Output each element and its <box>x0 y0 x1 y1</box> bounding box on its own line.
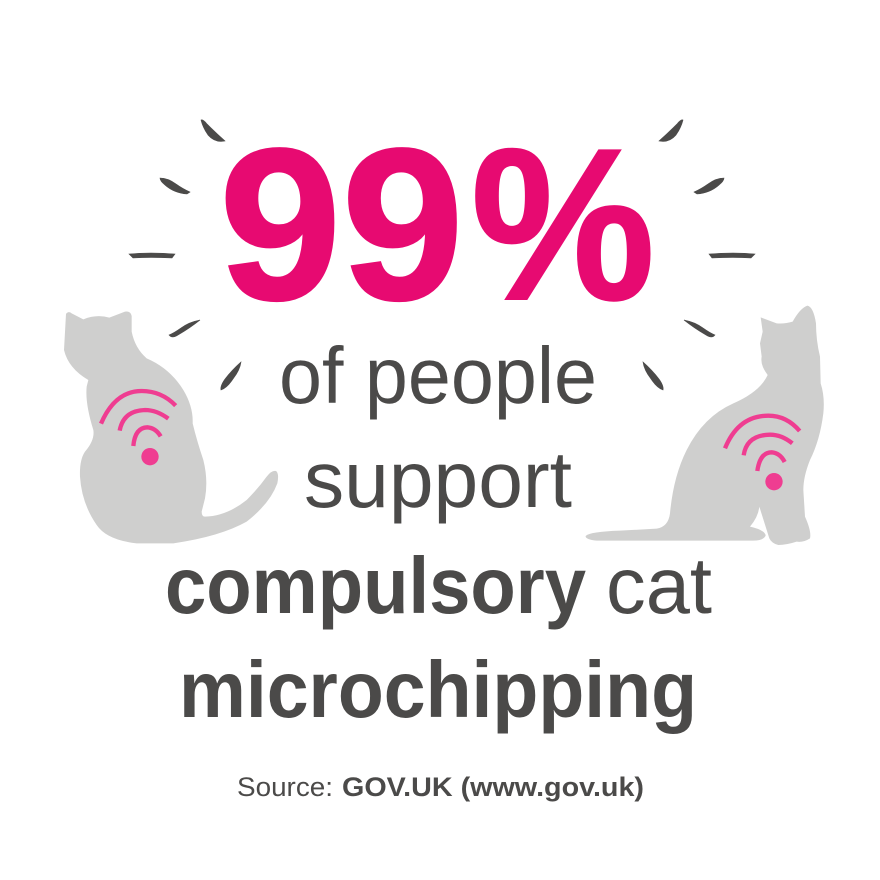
source line: GOV.UK (www.gov.uk) <box>342 772 644 802</box>
source line <box>237 772 644 802</box>
text: of people: of people <box>279 331 597 420</box>
text: compulsory cat: cat <box>606 541 712 630</box>
text: support: support <box>304 435 572 524</box>
text: microchipping: microchipping <box>179 645 697 734</box>
headline: 99%: % <box>471 103 655 345</box>
icon: right cat with microchip signal <box>586 306 824 545</box>
headline: 99% <box>219 103 655 345</box>
text: compulsory cat: compulsory <box>165 541 586 630</box>
source line: Source: <box>237 772 333 802</box>
headline: 99%: 99 <box>219 103 464 345</box>
icon: left cat with microchip signal <box>64 312 278 543</box>
burst rays around headline <box>129 120 755 390</box>
